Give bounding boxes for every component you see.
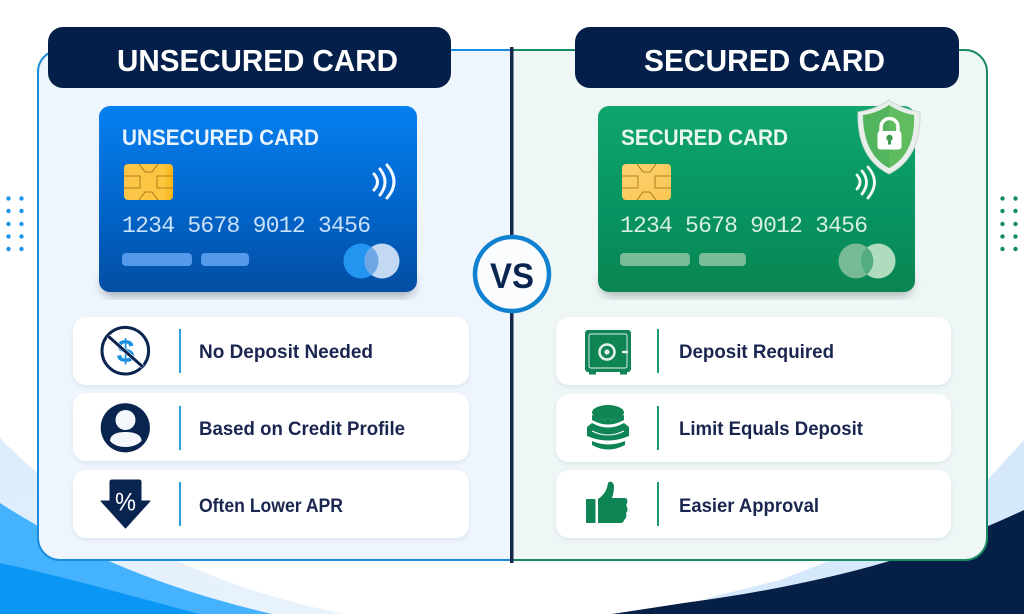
icon: thumbs up <box>586 482 628 523</box>
feature row: limit equals deposit <box>556 394 951 462</box>
credit card: green: SECURED CARD <box>621 125 788 150</box>
feature row: deposit required <box>556 317 951 385</box>
icon: crossed-out dollar: $ <box>117 333 135 369</box>
feature row: often lower apr: Often Lower APR <box>199 495 343 517</box>
panel: unsecured card <box>38 27 512 560</box>
credit card: green: 1234 5678 9012 3456 <box>620 213 868 239</box>
center divider <box>510 47 514 563</box>
heading: unsecured card: UNSECURED CARD <box>117 43 398 78</box>
icon: coin stack <box>587 405 629 450</box>
decorative dots: left <box>6 196 24 251</box>
icon: security shield <box>858 100 920 174</box>
feature row: easier approval <box>556 470 951 538</box>
icon: percent down arrow: % <box>115 488 136 516</box>
feature row: based on credit profile <box>73 393 469 461</box>
icon: crossed-out dollar <box>102 327 149 374</box>
feature row: limit equals deposit: Limit Equals Deposit <box>679 418 863 440</box>
icon: safe <box>585 330 631 374</box>
credit card: blue <box>99 106 417 296</box>
vs badge: VS <box>490 257 534 296</box>
feature row: based on credit profile: Based on Credit Profile <box>199 418 405 440</box>
feature row: no deposit needed: No Deposit Needed <box>199 341 373 363</box>
heading: unsecured card <box>48 27 451 88</box>
feature row: easier approval: Easier Approval <box>679 495 819 517</box>
icon: percent down arrow <box>101 480 150 528</box>
decorative dots: right <box>1000 196 1018 251</box>
vs badge <box>475 237 549 311</box>
heading: secured card <box>575 27 959 88</box>
heading: secured card: SECURED CARD <box>644 43 885 78</box>
background waves <box>0 438 1024 614</box>
feature row: often lower apr <box>73 470 469 538</box>
credit card: blue: UNSECURED CARD <box>122 125 319 150</box>
feature row: deposit required: Deposit Required <box>679 341 834 363</box>
feature row: no deposit needed <box>73 317 469 385</box>
credit card: blue: 1234 5678 9012 3456 <box>122 213 371 239</box>
credit card: green <box>598 100 920 296</box>
panel: secured card <box>512 27 987 560</box>
icon: person <box>101 403 150 452</box>
